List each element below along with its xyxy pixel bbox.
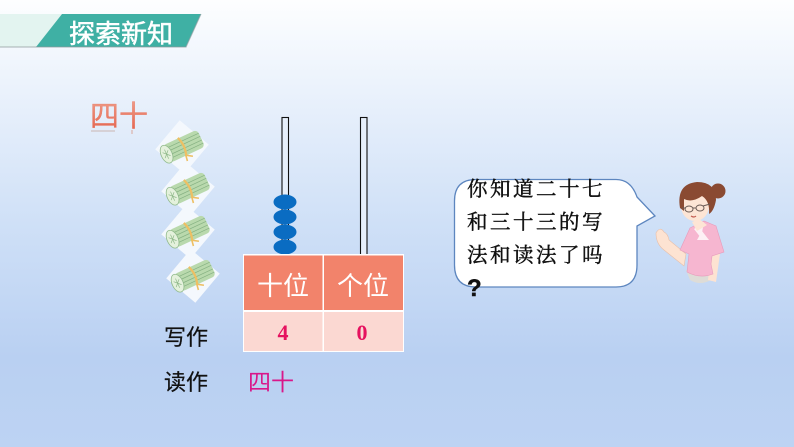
speech bubble [454,178,655,302]
teacher character [656,182,726,283]
abacus beads [274,194,296,254]
header text: 探索新知 [69,19,173,49]
table values: 4 [278,320,288,345]
lower body fade [686,270,714,283]
word title: four ten: 四十 [90,100,148,133]
bubble text: 和三十三的写 [467,211,605,234]
bubble text [467,178,605,302]
label: read as: 读作 [164,370,208,395]
bubble text: 法和读法了吗 [467,244,605,267]
place value table [243,254,404,352]
hair bun [710,184,726,198]
bubble text: ? [467,275,484,302]
table headers: 十位 [257,271,309,301]
face [681,191,709,221]
place value table: 个位 [337,271,389,301]
glasses [682,204,710,208]
collar [694,222,709,240]
place value table: 0 [356,320,368,345]
label: write as: 写作 [164,325,208,350]
abacus rods [282,118,367,256]
hair [679,182,716,214]
blouse [680,221,724,276]
bubble text: 你知道二十七 [467,178,605,201]
stick bundles [155,120,220,303]
lower arm [708,252,720,282]
answer: four ten: 四十 [248,369,294,395]
raised arm [656,229,686,266]
section header banner [0,14,201,49]
